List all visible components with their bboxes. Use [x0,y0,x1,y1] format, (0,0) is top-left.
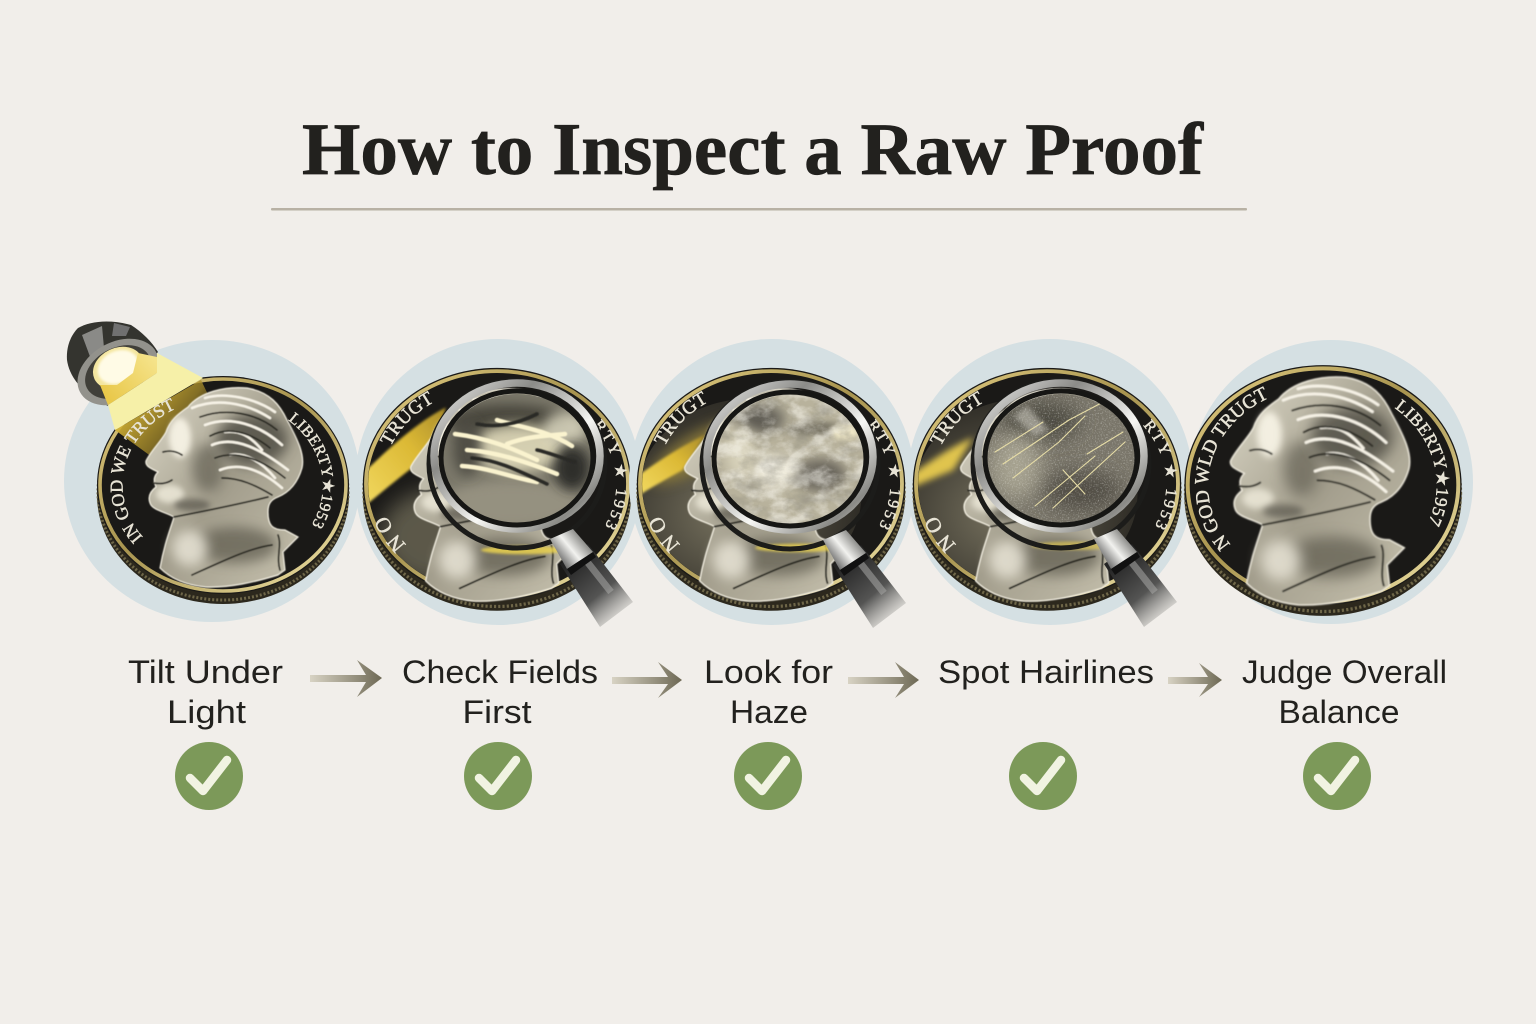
coin: N O [376,518,406,554]
coin [1184,365,1462,616]
coin: RTY ★ 1953 [597,418,628,530]
icon: check 2 [464,742,532,810]
label: look for haze [704,654,833,730]
label: judge overall balance [1242,654,1447,730]
panel: step 5 judge overall balance [1184,340,1473,624]
icon: check 3 [734,742,802,810]
title rule [271,208,1247,210]
background disc [64,340,360,622]
coin: LIBERTY★1953 [288,412,336,528]
coin [96,376,350,604]
coin: RTY ★ 1953 [1143,418,1178,530]
coin: TRUGT [653,390,706,444]
background disc [1189,340,1473,624]
coin [362,368,631,611]
background disc [907,339,1193,625]
panel: step 3 look for haze [629,339,911,628]
label: judge overall balance: Balance [1278,694,1400,730]
light band [913,437,974,487]
magnifier with haze detail [702,381,906,628]
coin [636,368,906,611]
label: tilt under light: Tilt Under [128,654,283,690]
coin: TRUGT [929,390,982,444]
label: check fields first [402,654,598,730]
coin: N O [926,518,956,554]
icon: check 4 [1009,742,1077,810]
magnifier with hair detail [429,380,633,627]
coin: RTY ★ 1953 [870,418,902,530]
panel: step 1 tilt under light [64,322,358,622]
panel: step 4 spot hairlines [911,339,1190,627]
coin: IN GOD WE TRUST [110,398,174,544]
arrow: step 1 to 2 [310,660,382,697]
title: How to Inspect a Raw Proof [302,109,1204,191]
magnifier with hairline scratches [973,380,1177,627]
icon: check 1 [175,742,243,810]
background disc [355,339,641,625]
arrow: step 2 to 3 [612,662,682,698]
arrow: step 3 to 4 [848,662,919,698]
coin: N O [650,518,680,554]
label: tilt under light [128,654,283,730]
background disc [629,339,915,625]
arrow: step 4 to 5 [1168,663,1222,697]
coin: TRUGT [379,390,432,444]
label: check fields first: Check Fields [402,654,598,690]
coin [912,368,1182,611]
label: judge overall balance: Judge Overall [1242,654,1447,690]
label: look for haze: Look for [704,654,833,690]
panel: step 2 check fields [358,339,635,627]
label: look for haze: Haze [730,694,808,730]
label: spot hairlines: Spot Hairlines [938,654,1154,690]
light band [368,406,447,504]
coin: LIBERTY★1957 [1394,398,1450,528]
icon: flashlight [66,321,170,419]
light beam [100,353,203,430]
label: check fields first: First [462,694,532,730]
light band [642,435,704,495]
coin: N GOD WLD TRUGT [1194,386,1267,552]
label: tilt under light: Light [167,694,246,730]
icon: check 5 [1303,742,1371,810]
